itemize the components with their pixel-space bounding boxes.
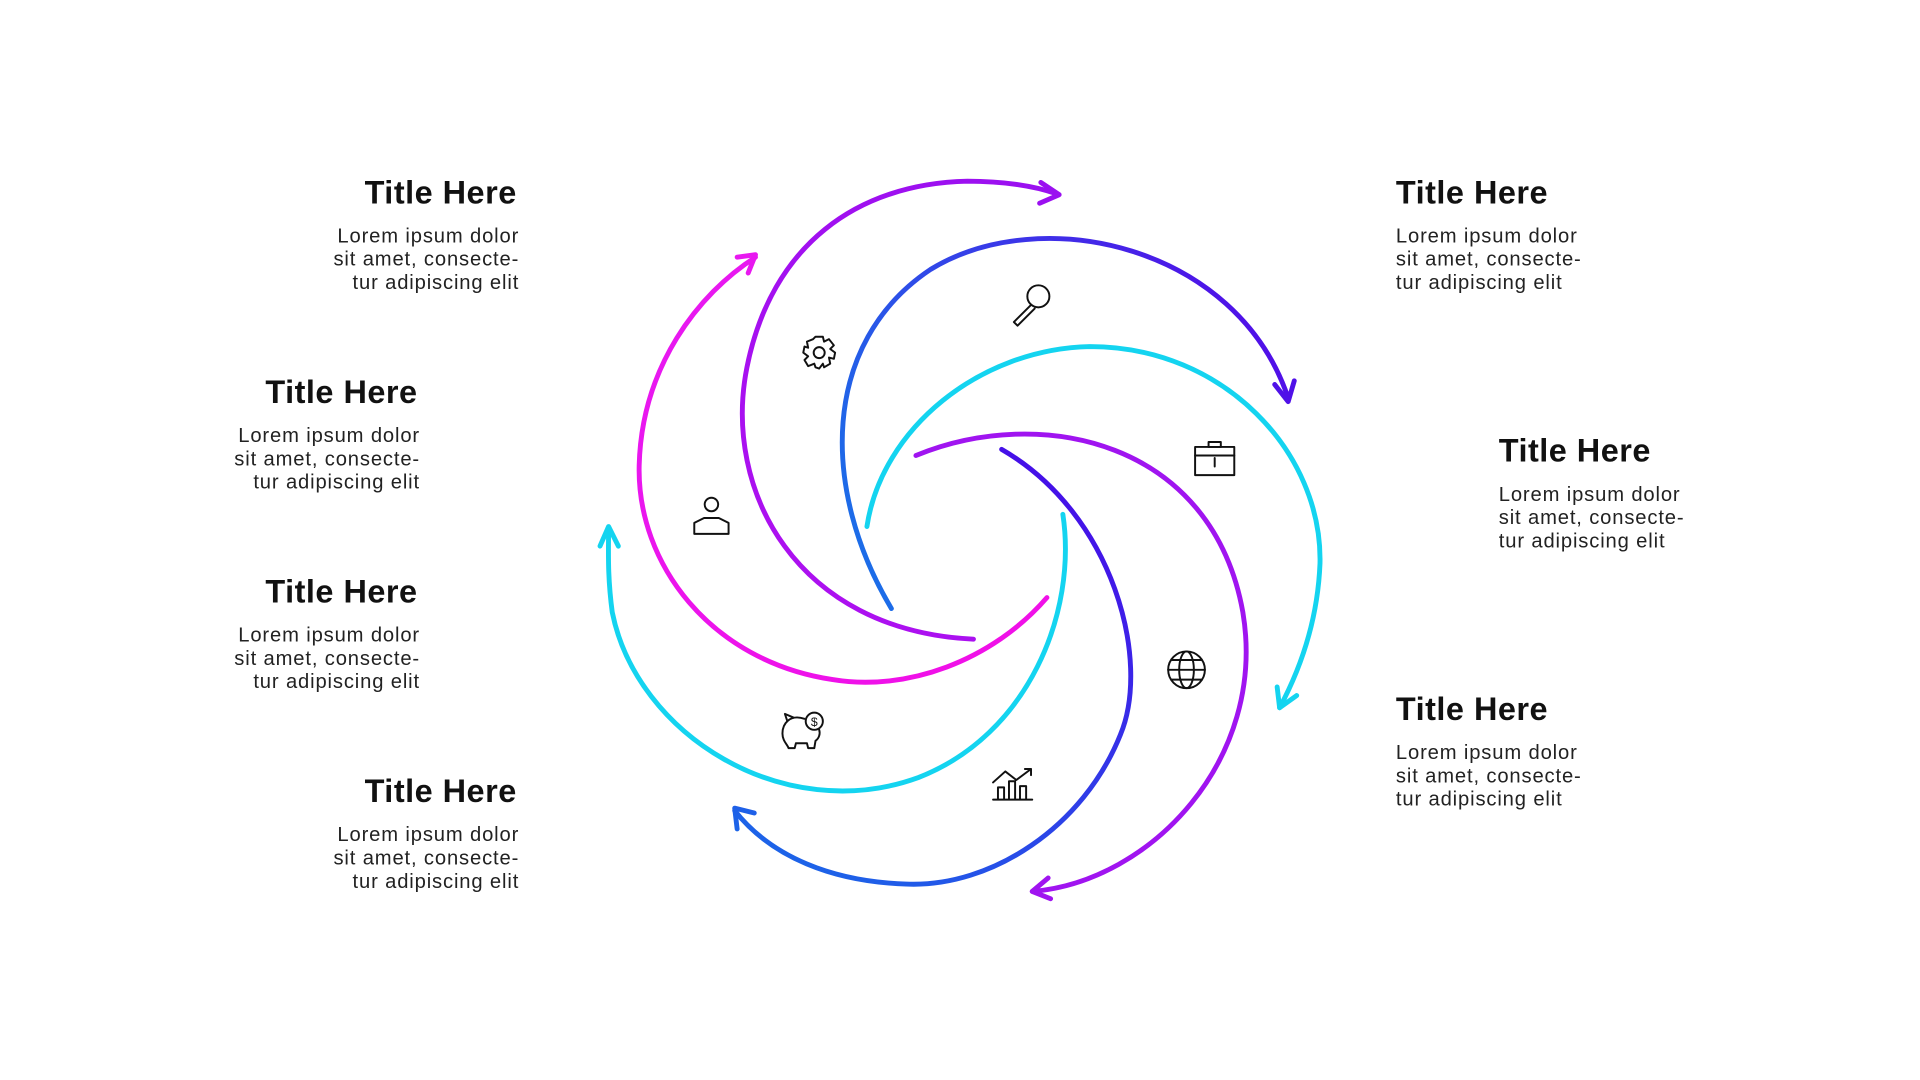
text block: left 2: sit amet, consecte-: [234, 448, 420, 470]
arrow 5: indigo: [735, 449, 1131, 884]
icon: briefcase: [1195, 442, 1234, 475]
arrow 1: purple: [742, 181, 1059, 639]
text block: right 3: tur adipiscing elit: [1396, 789, 1563, 811]
text block: left 1: [333, 174, 519, 294]
text block: right 3: sit amet, consecte-: [1396, 765, 1582, 787]
icon: person: [694, 498, 729, 534]
text block: right 2: sit amet, consecte-: [1499, 507, 1684, 529]
text block: left 3: [234, 573, 420, 693]
text block: left 4: [333, 773, 519, 893]
icon: piggy bank: [782, 713, 823, 748]
text block: right 1: [1396, 174, 1582, 294]
text block: left 4: Lorem ipsum dolor: [337, 824, 519, 846]
text block: left 2: [234, 374, 420, 494]
text block: left 4: tur adipiscing elit: [353, 871, 519, 893]
text block: left 1: Title Here: [365, 174, 517, 210]
arrow 3: cyan: [867, 347, 1320, 708]
text block: right 3: Lorem ipsum dolor: [1396, 742, 1578, 764]
text block: right 1: sit amet, consecte-: [1396, 249, 1582, 271]
text block: right 3: Title Here: [1396, 691, 1548, 727]
arrow 4: purple: [916, 434, 1246, 899]
text block: left 2: Lorem ipsum dolor: [238, 425, 420, 447]
text block: right 2: Title Here: [1499, 433, 1651, 469]
text block: left 2: tur adipiscing elit: [253, 472, 420, 494]
arrow 7: magenta: [639, 255, 1047, 682]
arrow 2: blue: [842, 239, 1294, 609]
text block: left 3: tur adipiscing elit: [253, 671, 420, 693]
text block: right 2: [1499, 433, 1684, 552]
text block: left 3: sit amet, consecte-: [234, 648, 420, 670]
icon: magnifier: [1014, 285, 1049, 326]
text block: left 1: tur adipiscing elit: [353, 272, 519, 294]
text block: left 4: sit amet, consecte-: [333, 847, 519, 869]
text block: left 1: sit amet, consecte-: [333, 249, 519, 271]
icon: globe: [1168, 651, 1205, 688]
icon: chart: [993, 769, 1032, 800]
text block: right 1: Title Here: [1396, 174, 1548, 210]
icon: gear: [803, 337, 835, 369]
text block: right 2: tur adipiscing elit: [1499, 530, 1665, 552]
text block: right 1: Lorem ipsum dolor: [1396, 225, 1578, 247]
text block: right 2: Lorem ipsum dolor: [1499, 484, 1681, 506]
text block: left 2: Title Here: [265, 374, 418, 410]
text block: left 3: Title Here: [265, 573, 418, 609]
text block: right 3: [1396, 691, 1582, 811]
icon: piggy bank: $: [811, 715, 818, 729]
arrow 6: cyan: [600, 514, 1065, 791]
text block: right 1: tur adipiscing elit: [1396, 272, 1563, 294]
text block: left 1: Lorem ipsum dolor: [337, 225, 519, 247]
text block: left 3: Lorem ipsum dolor: [238, 625, 420, 647]
text block: left 4: Title Here: [365, 773, 517, 809]
